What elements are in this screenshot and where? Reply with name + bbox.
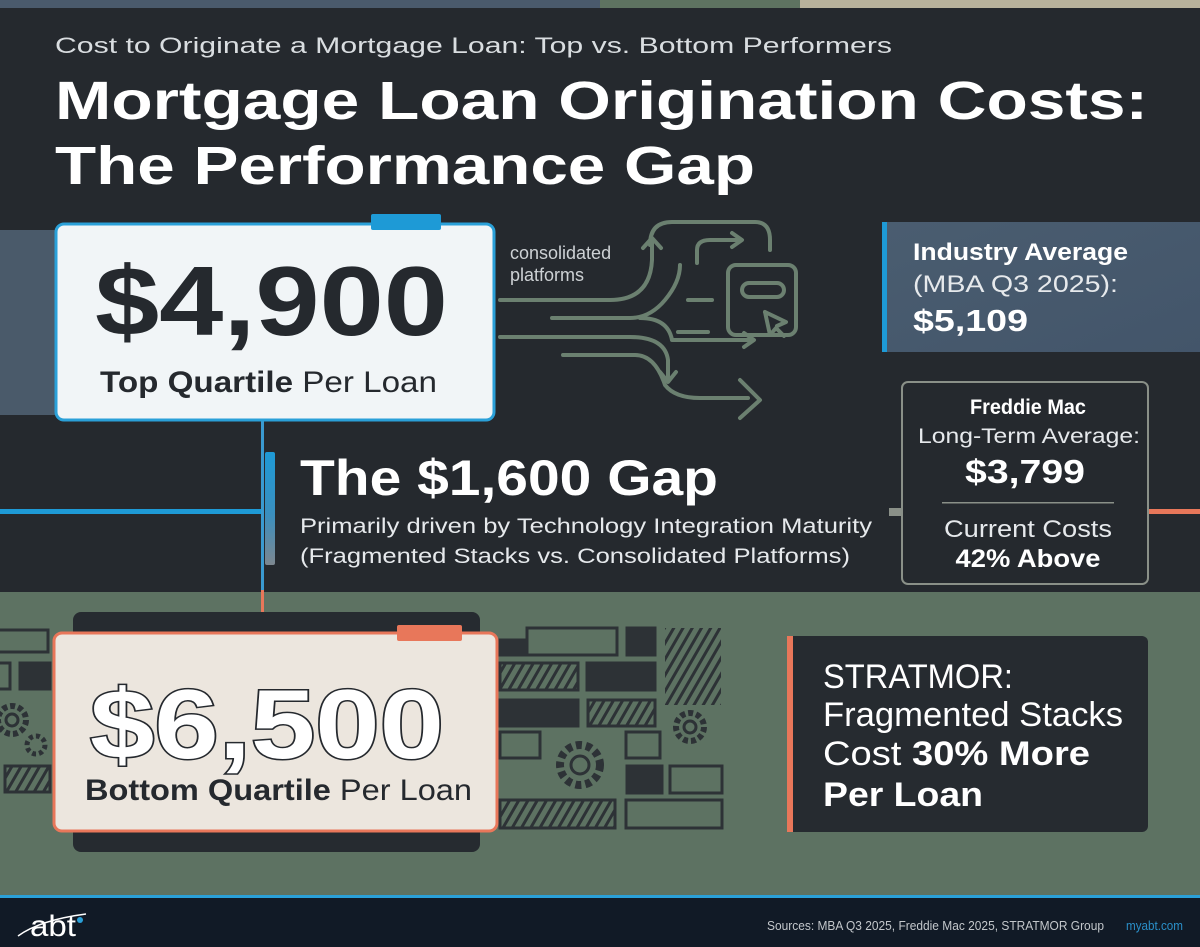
label: Bottom Quartile Per Loan bbox=[85, 774, 472, 807]
title bbox=[55, 71, 1148, 196]
left gray band bbox=[0, 230, 60, 415]
panel: industry average: (MBA Q3 2025): bbox=[913, 271, 1118, 298]
heading: the gap: Primarily driven by Technology Integration Maturity bbox=[300, 515, 873, 538]
panel: stratmor callout: Fragmented Stacks bbox=[823, 696, 1123, 734]
sources: Sources: MBA Q3 2025, Freddie Mac 2025, STRATMOR Group bbox=[767, 918, 1104, 933]
panel: industry average: Industry Average bbox=[913, 239, 1128, 266]
url: myabt.com bbox=[1126, 918, 1183, 933]
panel: freddie mac: Long-Term Average: bbox=[918, 425, 1140, 448]
subtitle: Cost to Originate a Mortgage Loan: Top vs. Bottom Performers bbox=[55, 33, 892, 58]
decorative fragmented blocks bbox=[0, 628, 722, 828]
top color stripe bbox=[0, 0, 1200, 8]
footer bbox=[0, 895, 1200, 947]
tab bbox=[371, 214, 441, 230]
panel: freddie mac bbox=[902, 382, 1148, 584]
heading: the gap: (Fragmented Stacks vs. Consolidated Platforms) bbox=[300, 545, 850, 568]
panel: industry average: $5,109 bbox=[913, 303, 1028, 338]
panel: industry average bbox=[882, 222, 1200, 352]
logo: abt bbox=[30, 910, 77, 943]
panel: top quartile bbox=[56, 214, 494, 420]
big number: $4,900 bbox=[95, 246, 448, 356]
panel: stratmor callout bbox=[787, 636, 1148, 832]
label: consolidated platforms: platforms bbox=[510, 265, 584, 285]
panel: stratmor callout: STRATMOR: bbox=[823, 658, 1013, 696]
connector lines bbox=[0, 420, 1200, 632]
panel: stratmor callout: Per Loan bbox=[823, 776, 983, 814]
icon: consolidation arrows bbox=[500, 222, 796, 418]
panel: bottom quartile bbox=[54, 612, 497, 852]
big number outlined: $6,500 bbox=[90, 669, 444, 779]
panel: freddie mac: Freddie Mac bbox=[970, 396, 1086, 419]
label: Top Quartile Per Loan bbox=[100, 366, 437, 399]
icons: gears bbox=[0, 706, 704, 785]
heading: the gap bbox=[300, 450, 873, 568]
heading: the gap: The $1,600 Gap bbox=[300, 450, 718, 506]
panel: freddie mac: 42% Above bbox=[956, 545, 1101, 573]
title: The Performance Gap bbox=[55, 136, 755, 196]
panel: stratmor callout: Cost 30% More bbox=[823, 735, 1090, 773]
panel: freddie mac: $3,799 bbox=[965, 453, 1085, 490]
green lower region bbox=[0, 592, 1200, 896]
tab bbox=[397, 625, 462, 641]
label: consolidated platforms: consolidated bbox=[510, 243, 611, 263]
title: Mortgage Loan Origination Costs: bbox=[55, 71, 1148, 131]
logo bbox=[18, 910, 86, 943]
panel: freddie mac: Current Costs bbox=[944, 516, 1112, 543]
label: consolidated platforms bbox=[510, 243, 611, 285]
